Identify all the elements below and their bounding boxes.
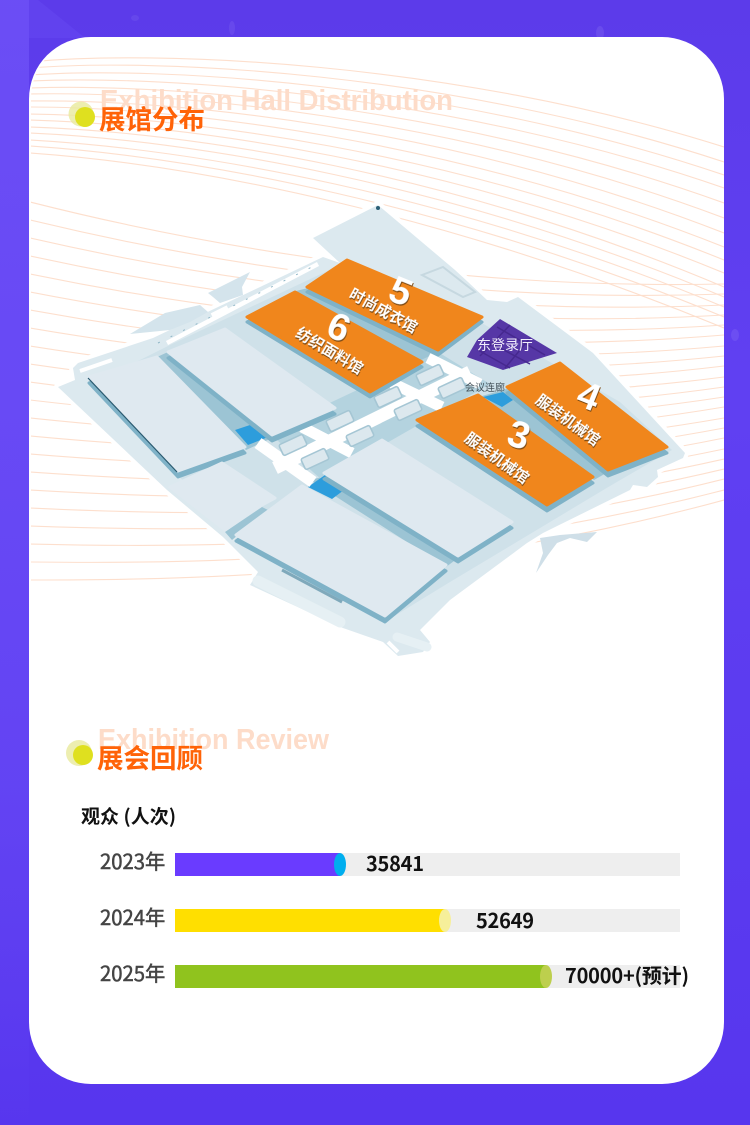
hall 4: 服装机械馆 <box>532 391 604 449</box>
bar 2024: 52649 <box>476 905 534 934</box>
bar 2025: 70000+(预计) <box>565 960 689 989</box>
hall 6: 6 <box>321 304 356 351</box>
hall 3: 服装机械馆 <box>461 429 533 487</box>
bar 2023 <box>100 845 680 877</box>
hall 6: 纺织面料馆 <box>293 324 366 378</box>
bar 2025 <box>100 957 689 989</box>
heading: exhibition review <box>66 724 329 774</box>
hall 3: 3 <box>502 412 535 459</box>
hall 5: 5 <box>383 268 418 315</box>
hall: west grey halls <box>88 329 335 530</box>
hall 3 <box>417 395 593 511</box>
heading: exhibition hall distribution <box>68 85 453 135</box>
icon: heading dot <box>68 102 95 127</box>
channels between halls <box>157 288 608 567</box>
hall 5: 时尚成衣馆 <box>346 285 421 337</box>
chinese title: 展会回顾 <box>97 744 203 774</box>
white walkways <box>258 358 480 482</box>
map ground <box>58 205 685 656</box>
east registration hall <box>467 319 557 370</box>
chinese title: 展馆分布 <box>99 105 205 135</box>
bar chart: visitors <box>100 845 689 989</box>
bar 2025: 2025年 <box>100 957 165 987</box>
hall 6 <box>247 292 422 397</box>
conference corridor label: 会议连廊 <box>465 381 505 394</box>
venue map <box>58 205 685 656</box>
hall 4 <box>507 363 667 476</box>
east registration hall: 东登录厅 <box>477 337 533 353</box>
icon: heading dot <box>66 740 93 766</box>
chart title: 观众 (人次) <box>81 802 176 829</box>
english subtitle: Exhibition Review <box>98 724 329 756</box>
bar 2024 <box>100 901 680 934</box>
bar 2023: 35841 <box>366 848 424 877</box>
bar 2024: 2024年 <box>100 901 165 931</box>
english subtitle: Exhibition Hall Distribution <box>100 85 453 117</box>
bar 2023: 2023年 <box>100 845 165 875</box>
courtyard platforms <box>279 364 466 470</box>
glass links <box>235 392 513 499</box>
hall 4: 4 <box>571 373 606 420</box>
background contour lines <box>30 58 724 580</box>
light spine background <box>268 352 490 480</box>
hall: south grey halls <box>236 440 512 622</box>
hall 5 <box>307 260 482 355</box>
